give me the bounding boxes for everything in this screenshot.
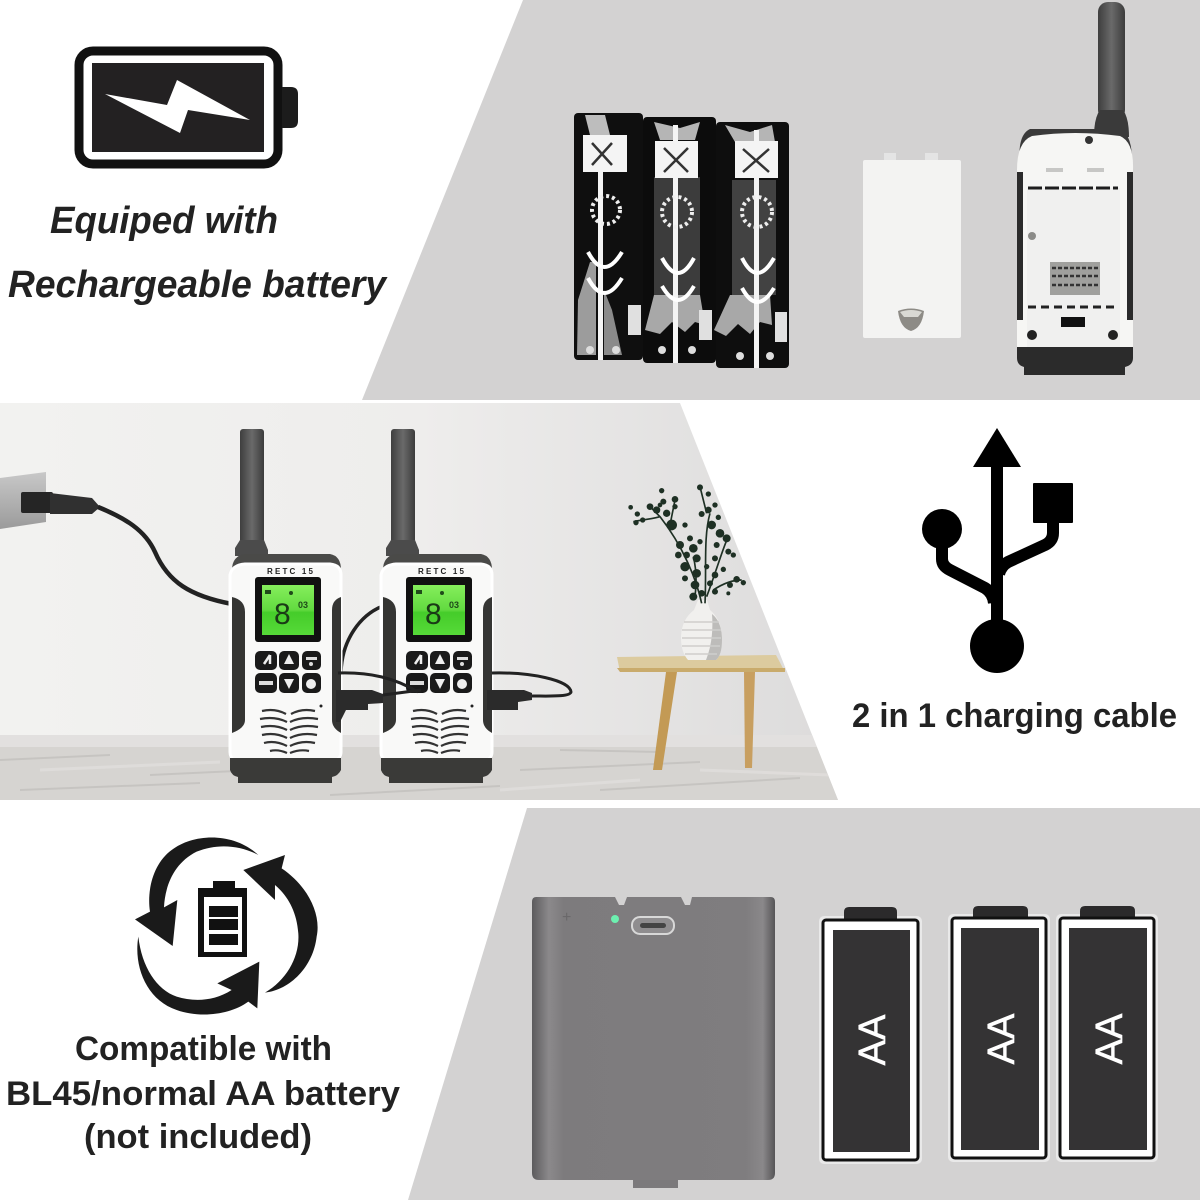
cell 2 [643,117,716,363]
icon: recycling battery [135,837,318,1015]
heading: rechargeable battery: Rechargeable battery [8,264,388,306]
AA battery 3: AA [1089,1013,1131,1064]
radio left: RETC 15 [267,567,314,576]
icon: USB symbol [922,428,1073,673]
caption: compatibility [6,1030,400,1156]
radio right [381,429,492,783]
AA battery 1: AA [852,1014,894,1065]
AA battery 2 [948,906,1050,1162]
cell 3 [714,122,789,368]
AA battery 3 [1056,906,1158,1162]
plant [628,484,746,603]
radio right: 03 [449,600,459,610]
charging cables over radios [336,673,571,722]
caption: compatibility: (not included) [84,1118,312,1156]
radio left: 8 [274,598,291,631]
panel: top grey background [362,0,1200,400]
caption: charging cable: 2 in 1 charging cable [852,697,1177,735]
BL45 battery pack [532,897,775,1188]
radio left: 03 [298,600,308,610]
BL45 battery pack: + [562,909,571,926]
vase [681,600,722,660]
AA battery 1 [819,907,922,1164]
AA battery 2: AA [981,1013,1023,1064]
table [617,655,785,770]
AA cells with wrapper [574,113,789,368]
radio right: RETC 15 [418,567,465,576]
back view of radio [1017,2,1133,375]
arc cable behind radios [342,606,380,672]
panel: room scene [0,403,840,800]
icon: charging battery [79,51,298,164]
radio left [230,429,341,783]
radio right: 8 [425,598,442,631]
caption: compatibility: Compatible with [75,1030,332,1068]
caption: compatibility: BL45/normal AA battery [6,1075,400,1113]
panel: bottom grey background [408,808,1200,1200]
battery cover [863,153,961,338]
heading: rechargeable battery: Equiped with [50,200,278,242]
heading: rechargeable battery [8,200,388,306]
charger and cable [0,472,232,604]
cell 1 [574,113,643,360]
